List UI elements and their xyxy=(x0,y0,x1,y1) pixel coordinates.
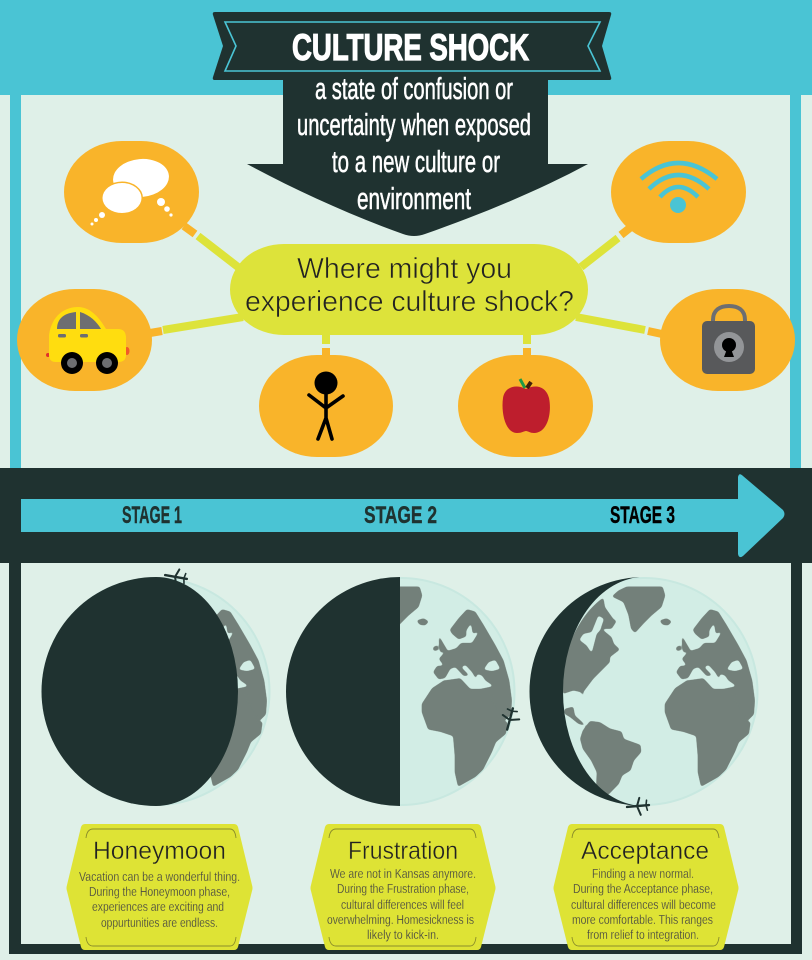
bubble: apple xyxy=(458,355,593,457)
right teal rail xyxy=(790,95,801,470)
stage labels: STAGE 3 xyxy=(610,502,675,529)
bubble: padlock xyxy=(660,289,795,391)
card: honeymoon: During the Honeymoon phase, xyxy=(89,885,230,899)
central question bubble: experience culture shock? xyxy=(245,286,574,318)
card: honeymoon xyxy=(66,824,252,950)
central question bubble xyxy=(230,244,588,335)
card: acceptance: from relief to integration. xyxy=(587,928,699,942)
title ribbon: CULTURE SHOCK xyxy=(292,27,529,68)
bubble: person xyxy=(259,355,393,457)
stage band xyxy=(0,468,812,563)
lower panel frame xyxy=(9,560,802,954)
card: frustration: During the Frustration phase, xyxy=(337,882,469,896)
card: acceptance xyxy=(554,824,738,950)
card: honeymoon: experiences are exciting and xyxy=(92,900,224,914)
card: acceptance: During the Acceptance phase, xyxy=(573,882,713,896)
globe: acceptance xyxy=(530,577,758,816)
definition arrow: a state of confusion or xyxy=(315,71,513,106)
left teal rail xyxy=(10,95,21,470)
card: frustration xyxy=(310,824,496,950)
card: frustration: overwhelming. Homesickness is xyxy=(327,913,474,927)
stage labels xyxy=(122,502,675,529)
stage labels: STAGE 2 xyxy=(364,502,437,529)
bubble: car xyxy=(17,289,152,391)
card: honeymoon: Honeymoon xyxy=(93,837,226,865)
card: frustration: likely to kick-in. xyxy=(367,928,439,942)
top teal band xyxy=(0,0,812,95)
card: honeymoon: Vacation can be a wonderful thing. xyxy=(79,870,240,884)
definition arrow: to a new culture or xyxy=(332,144,500,179)
definition arrow: environment xyxy=(357,181,471,216)
bubble: conversation xyxy=(64,141,199,243)
card: acceptance: Finding a new normal. xyxy=(592,867,694,881)
card: acceptance: more comfortable. This ranges xyxy=(572,913,713,927)
stage labels: STAGE 1 xyxy=(122,502,182,529)
card: frustration: Frustration xyxy=(348,837,458,865)
card: frustration: cultural differences will feel xyxy=(341,898,464,912)
central question bubble: Where might you xyxy=(297,253,512,285)
card: acceptance: cultural differences will become xyxy=(571,898,716,912)
globe: frustration xyxy=(286,577,522,806)
stage arrow xyxy=(21,474,784,557)
connector lines xyxy=(150,226,662,357)
globe: honeymoon xyxy=(42,567,270,806)
card: acceptance: Acceptance xyxy=(581,837,709,865)
definition arrow xyxy=(247,71,588,236)
definition arrow: uncertainty when exposed xyxy=(297,107,531,142)
title ribbon xyxy=(213,12,611,80)
card: frustration: We are not in Kansas anymore. xyxy=(330,867,476,881)
bubble: wifi xyxy=(611,141,746,243)
card: honeymoon: oppurtunities are endless. xyxy=(101,916,218,930)
